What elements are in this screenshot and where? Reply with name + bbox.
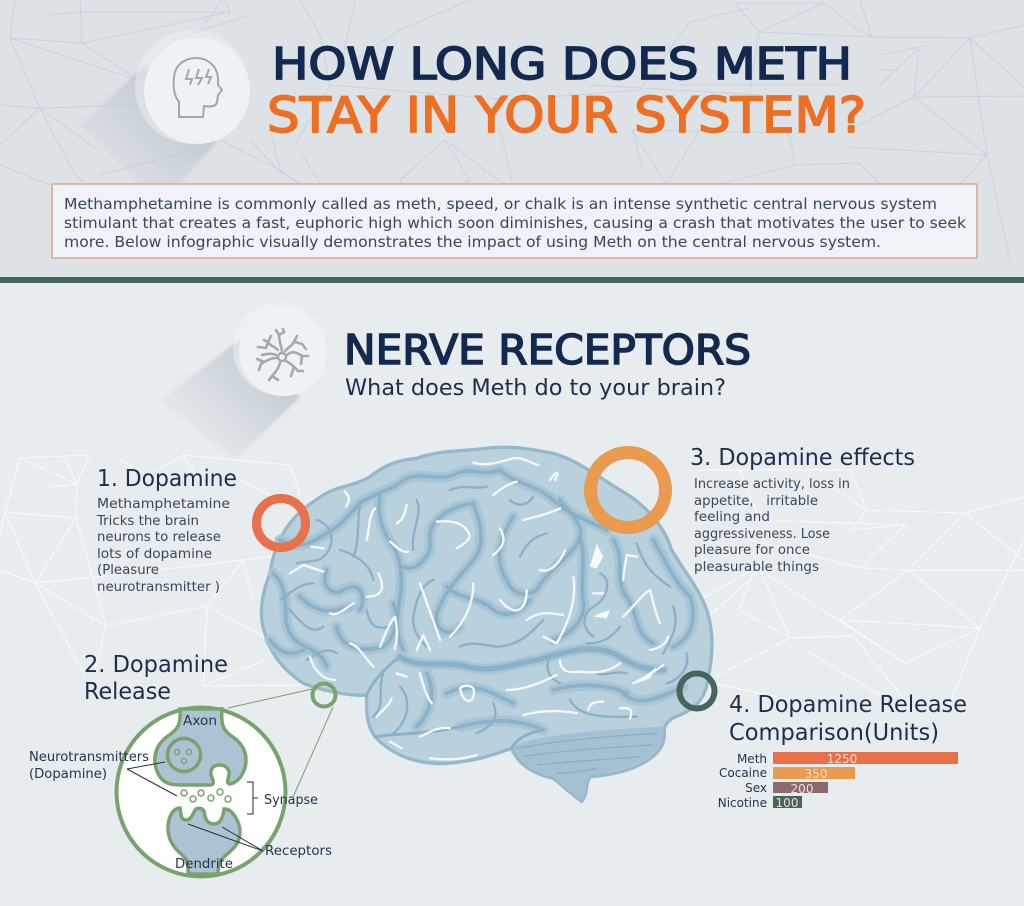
marker ring: dopamine <box>256 498 306 548</box>
text block: 1. dopamine: lots of dopamine <box>97 547 212 562</box>
marker ring: release comparison <box>680 674 714 708</box>
text block: 1. dopamine: Methamphetamine <box>97 497 230 512</box>
bar chart: dopamine release units: Meth <box>737 752 767 766</box>
intro text box: stimulant that creates a fast, euphoric high which soon diminishes, causing a crash that motivates the user to seek <box>64 214 966 232</box>
intro text box: Methamphetamine is commonly called as meth, speed, or chalk is an intense synthetic central nervous system <box>64 195 937 213</box>
diagram labels: (Dopamine) <box>29 767 107 782</box>
text block: 1. dopamine: (Pleasure <box>97 563 159 578</box>
heading: 4. dopamine release comparison <box>729 692 967 746</box>
bar chart: dopamine release units: Cocaine <box>719 766 767 780</box>
text block: 1. dopamine: 1. Dopamine <box>97 466 237 492</box>
heading: 2. dopamine release <box>84 652 228 705</box>
bar chart: dopamine release units: 1250 <box>827 752 857 766</box>
marker ring: dopamine release <box>312 684 336 706</box>
text block: 3. dopamine effects: aggressiveness. Lose <box>694 527 830 542</box>
text block: 3. dopamine effects <box>690 445 915 575</box>
intro text box <box>52 184 977 258</box>
brain folds: main sulci <box>270 470 693 748</box>
brain illustration <box>261 447 712 801</box>
title: HOW LONG DOES METH <box>272 39 852 90</box>
diagram labels: Neurotransmitters <box>29 750 149 765</box>
heading: 2. dopamine release: Release <box>84 679 171 705</box>
axon terminal <box>155 709 246 785</box>
bar chart: dopamine release units: 350 <box>805 767 827 781</box>
text block: 3. dopamine effects: 3. Dopamine effects <box>690 445 915 471</box>
diagram labels: Dendrite <box>175 857 233 872</box>
title <box>267 39 866 144</box>
icon: neuron <box>160 303 327 460</box>
text block: 1. dopamine: neurotransmitter ) <box>97 580 220 595</box>
dendrite terminal <box>168 808 240 874</box>
text block: 1. dopamine <box>96 466 237 595</box>
synaptic vesicle <box>168 738 200 772</box>
heading: 2. dopamine release: 2. Dopamine <box>84 652 228 678</box>
diagram labels: Synapse <box>264 793 318 808</box>
text block: 3. dopamine effects: pleasure for once <box>694 543 810 558</box>
bar chart: dopamine release units: Sex <box>745 781 767 795</box>
synapse diagram <box>29 708 332 876</box>
diagram labels: Axon <box>183 714 217 729</box>
icon: head with lightning bolts <box>80 30 250 205</box>
bar chart: dopamine release units: 200 <box>791 782 813 796</box>
bar chart: dopamine release units <box>718 752 958 810</box>
released dopamine dots <box>181 789 231 802</box>
text block: 3. dopamine effects: appetite, irritable <box>694 494 818 509</box>
heading: 4. dopamine release comparison: Comparison(Units) <box>729 720 939 746</box>
bar chart: dopamine release units: 100 <box>776 796 798 810</box>
title: STAY IN YOUR SYSTEM? <box>267 87 866 144</box>
brain highlights <box>290 458 668 759</box>
leader lines and synapse bracket <box>127 762 263 851</box>
diagram labels <box>29 714 332 872</box>
section heading: nerve receptors: What does Meth do to your brain? <box>345 376 726 401</box>
text block: 1. dopamine: Tricks the brain <box>96 514 199 529</box>
bar chart: dopamine release units: Nicotine <box>718 796 767 810</box>
heading: 4. dopamine release comparison: 4. Dopamine Release <box>729 692 967 718</box>
text block: 3. dopamine effects: pleasurable things <box>694 560 819 575</box>
text block: 3. dopamine effects: Increase activity, loss in <box>694 477 850 492</box>
text block: 3. dopamine effects: feeling and <box>694 510 770 525</box>
connector lines from green marker to synapse detail <box>228 689 333 797</box>
section heading: nerve receptors <box>344 326 751 401</box>
diagram labels: Receptors <box>265 844 332 859</box>
text block: 1. dopamine: neurons to release <box>97 530 221 545</box>
marker ring: dopamine effects <box>590 452 666 528</box>
intro text box: more. Below infographic visually demonstrates the impact of using Meth on the central nervous system. <box>64 233 881 251</box>
brain folds: soft shading <box>270 470 693 730</box>
section heading: nerve receptors: NERVE RECEPTORS <box>344 326 751 374</box>
